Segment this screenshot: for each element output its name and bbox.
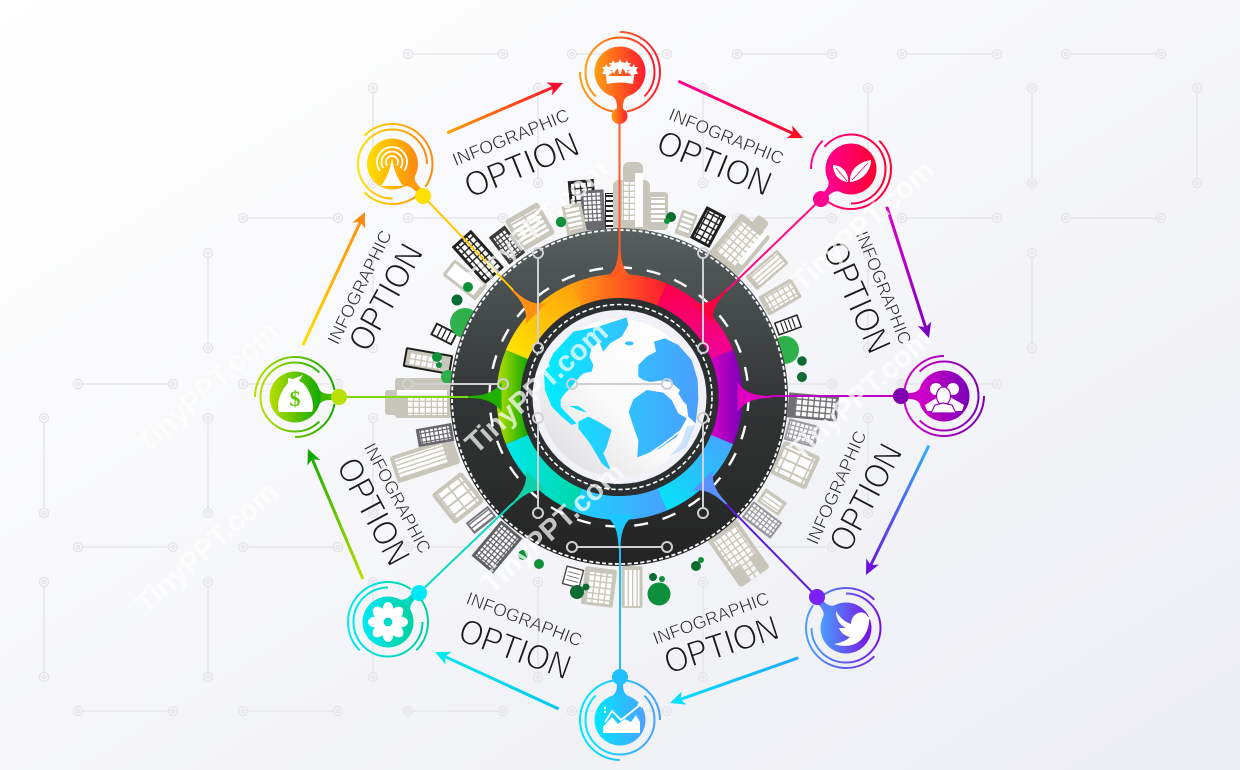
node south west flower [348,582,428,662]
spoke north west [423,196,513,290]
node top crown [580,32,660,124]
road centre dashes [490,268,748,526]
watermark: TinyPPT.com [459,153,614,297]
icon: money bag: $ [290,386,300,411]
label south south west [454,588,585,687]
arrow top to pink [675,75,806,144]
spoke lines [339,116,901,677]
label east north east: INFOGRAPHIC [852,228,915,347]
label west north west: INFOGRAPHIC [323,227,396,347]
label west south west: OPTION [329,451,418,572]
watermark: TinyPPT.com [130,316,285,460]
label south south west: OPTION [454,611,576,687]
label east north east: OPTION [815,235,898,359]
globe sphere [540,319,698,477]
circuit lines over road [403,248,708,552]
globe [520,298,718,496]
flare west [468,382,502,412]
node south east bird [806,588,886,668]
flare south east [692,470,738,515]
spoke west [339,396,468,398]
trees [432,212,807,606]
road surface [450,228,788,566]
arrow yellow to top [445,77,566,139]
spoke south west [419,503,513,593]
spoke south [619,548,621,677]
flare south [604,515,634,549]
spoke north east [726,199,821,291]
flare north west [501,279,547,324]
segment south east [657,435,733,511]
segment west [497,350,528,444]
flare east [738,382,772,412]
watermark [129,153,940,620]
watermark: TinyPPT.com [459,316,614,460]
node south chart [580,669,660,760]
label north north west: INFOGRAPHIC [450,105,572,170]
globe plate [532,310,706,484]
continents [544,317,698,472]
node east people [893,356,984,436]
label north north west: OPTION [459,125,585,206]
spoke top [618,116,620,250]
city skyline ring [385,162,839,608]
icon: people [925,383,964,413]
icon: signal tower [377,147,407,186]
label south south east: OPTION [659,608,784,682]
label north north east: INFOGRAPHIC [666,104,787,169]
flare south west [501,470,547,515]
watermark: TinyPPT.com [475,456,630,600]
segment north west [506,283,582,359]
label south south east: INFOGRAPHIC [650,588,772,649]
segment north east [657,283,733,359]
label west north west: OPTION [341,237,431,358]
watermark: TinyPPT.com [785,154,940,298]
label west south west: INFOGRAPHIC [360,440,435,557]
node north west signal tower [352,124,432,204]
arrow purple to violet [860,442,935,578]
watermark: TinyPPT.com [129,476,284,620]
icon: crown [602,59,638,84]
icon: chart [603,702,642,733]
icon: bird [834,611,873,646]
spoke south east [726,504,817,597]
arrow green to yellow [297,209,371,348]
node west money bag [255,357,347,437]
label north north east: OPTION [651,123,777,204]
node north east leaves [811,129,891,209]
segment south west [506,435,582,511]
spoke east [770,395,901,397]
segment south [572,488,667,520]
label east south east: OPTION [821,437,910,558]
inner road [520,298,718,496]
option labels [323,104,915,687]
label east south east: INFOGRAPHIC [803,428,870,547]
flare top [606,245,632,277]
arrow blue to teal [432,646,561,715]
watermark: TinyPPT.com [783,323,938,467]
color ring [497,274,742,520]
label south south west: INFOGRAPHIC [464,588,585,651]
segment east [711,350,742,444]
arrow pink to purple [880,204,936,340]
icon: leaves [833,160,871,182]
arrows [297,75,936,715]
arrow violet to blue [668,651,801,710]
road edge dashes [452,230,786,564]
arrow teal to green [302,446,369,582]
segment top [572,274,667,306]
road ring [450,228,788,566]
flare north east [692,279,738,324]
icon: flower [368,602,408,642]
spoke flares [468,245,772,549]
